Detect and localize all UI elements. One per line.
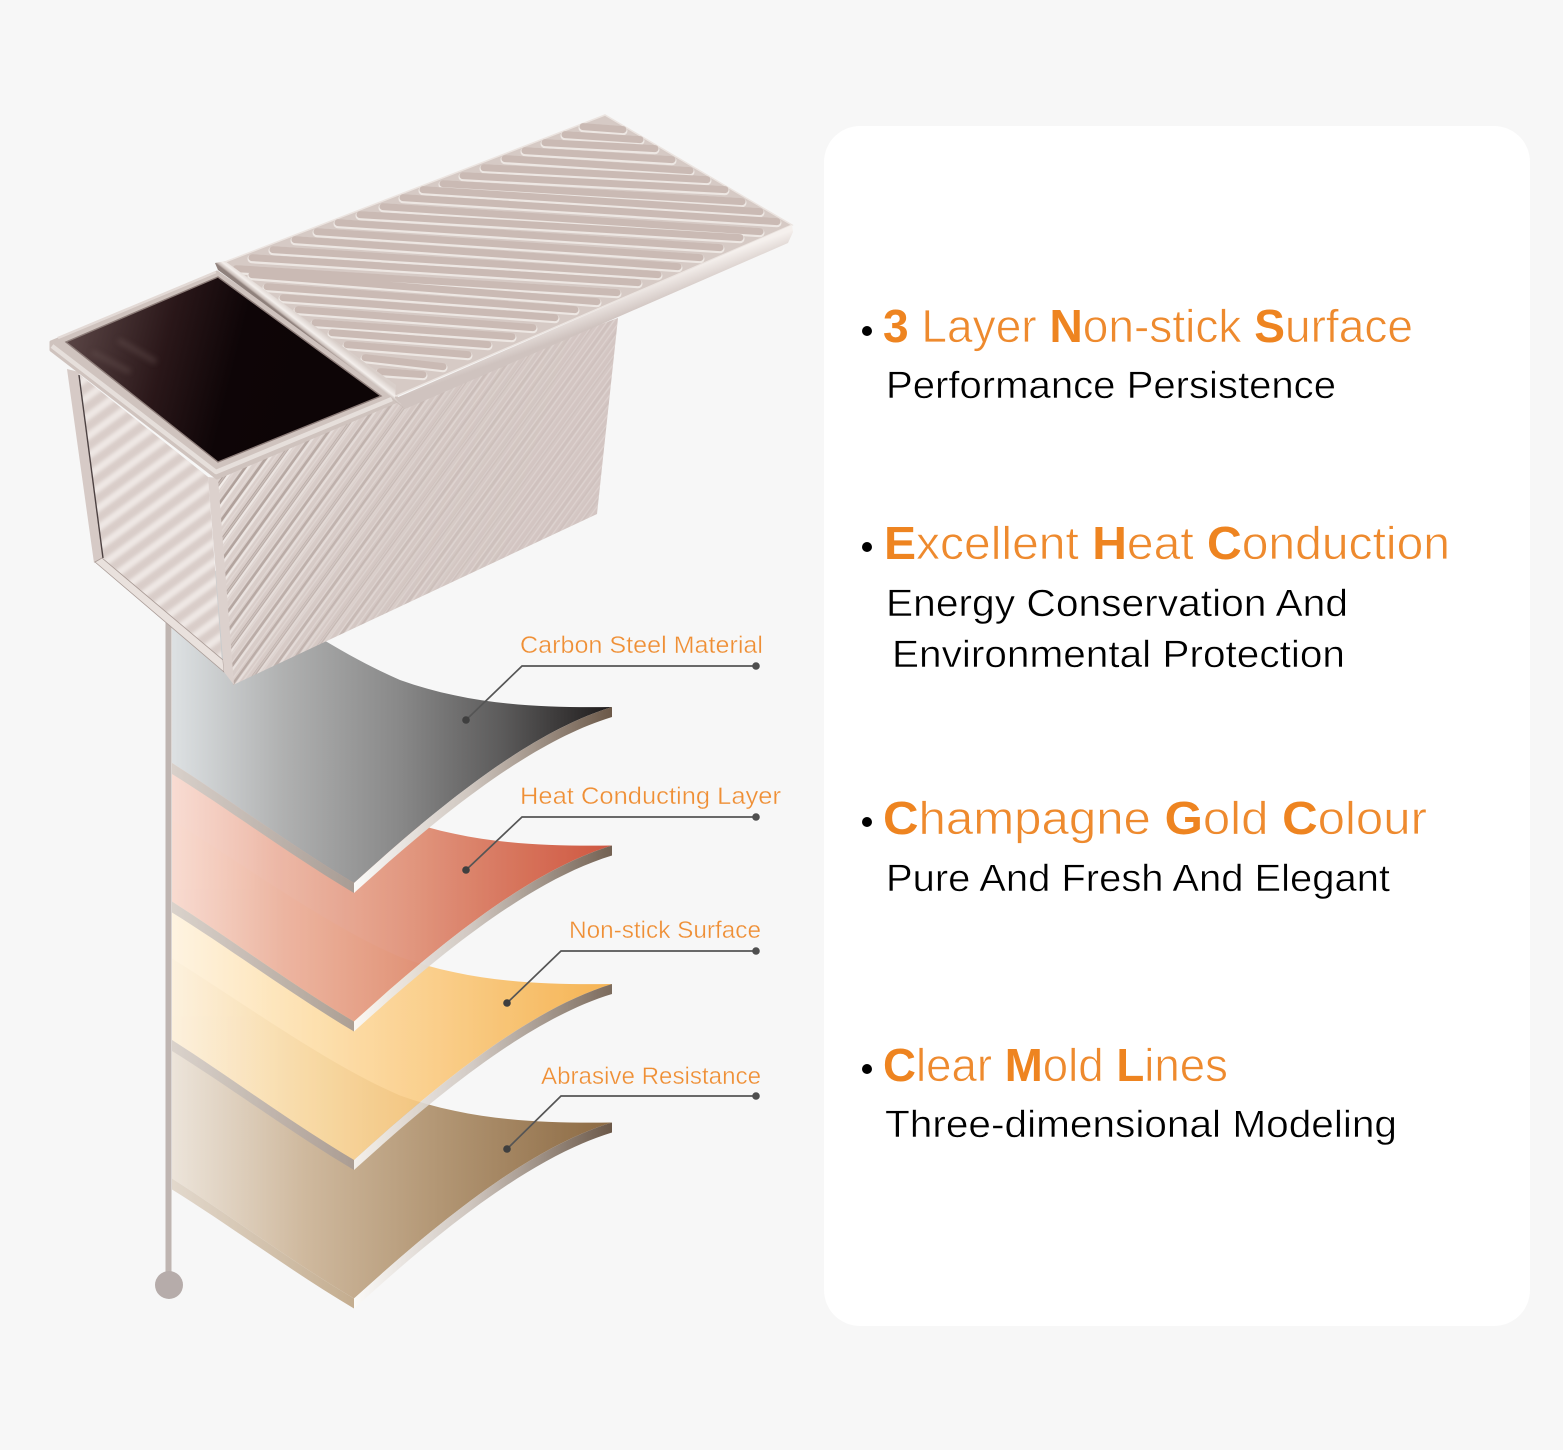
feature 3: champagne gold colour: Champagne Gold Colour — [883, 792, 1427, 844]
callout: carbon steel material: Carbon Steel Material — [520, 632, 763, 659]
callout: abrasive resistance — [503, 1063, 761, 1153]
loaf pan with sliding lid — [50, 115, 793, 690]
lid front lip — [396, 225, 793, 409]
feature 4: clear mold lines — [862, 1039, 1397, 1146]
pan rim and dark interior — [51, 272, 400, 478]
layer 4: abrasive resistance sheet — [172, 958, 612, 1308]
vertical layer axis with end dot — [155, 620, 183, 1299]
feature 1: non-stick surface: 3 Layer Non-stick Surface — [883, 300, 1413, 352]
white feature panel — [824, 126, 1530, 1326]
feature 3: champagne gold colour: Pure And Fresh And Elegant — [886, 858, 1390, 900]
feature 4: clear mold lines: Three-dimensional Modeling — [885, 1104, 1397, 1146]
feature 2: heat conduction: Energy Conservation And — [886, 583, 1348, 625]
callout: carbon steel material — [462, 632, 763, 724]
layer 1: carbon steel sheet — [172, 543, 612, 893]
layer 2: heat conducting sheet — [172, 682, 612, 1032]
layer 3: non-stick surface sheet — [172, 820, 612, 1170]
feature 1: non-stick surface — [862, 300, 1413, 407]
callout: non-stick surface: Non-stick Surface — [569, 917, 761, 944]
lid top with diagonal ribs — [225, 115, 792, 396]
feature 2: heat conduction — [862, 517, 1450, 676]
feature 1: non-stick surface: Performance Persistence — [886, 365, 1336, 407]
feature 2: heat conduction: Excellent Heat Conduction — [884, 517, 1450, 569]
lid left rail — [215, 261, 405, 409]
callout: non-stick surface — [503, 917, 761, 1007]
feature 4: clear mold lines: Clear Mold Lines — [883, 1039, 1228, 1091]
callout: heat conducting layer — [462, 783, 781, 874]
infographic canvas — [50, 114, 1446, 1308]
callout: heat conducting layer: Heat Conducting Layer — [520, 783, 781, 810]
feature 3: champagne gold colour — [862, 792, 1427, 900]
feature 2: heat conduction: Environmental Protection — [892, 634, 1345, 676]
pan left side face — [67, 369, 224, 673]
callout: abrasive resistance: Abrasive Resistance — [541, 1063, 761, 1090]
pan front long face — [208, 318, 618, 685]
